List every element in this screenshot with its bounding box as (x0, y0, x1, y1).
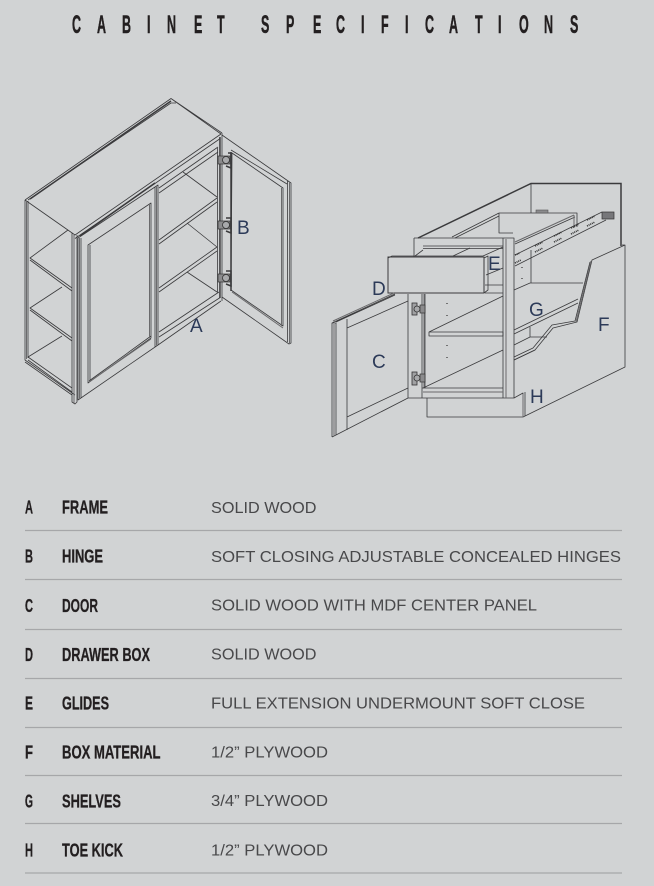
row B: SOFT CLOSING ADJUSTABLE CONCEALED HINGES (211, 549, 621, 566)
label D: D (372, 279, 386, 300)
row B (25, 546, 622, 580)
row E: E (25, 692, 33, 714)
open door (222, 135, 291, 344)
row D: SOLID WOOD (211, 646, 316, 664)
title: CABINET SPECIFICATIONS (72, 11, 578, 39)
row A: FRAME (62, 496, 108, 518)
drawer glide (515, 212, 614, 266)
row G (25, 790, 622, 824)
specification table (25, 496, 622, 873)
label C: C (372, 352, 386, 373)
front frame (408, 238, 514, 398)
closed door (78, 185, 158, 400)
diagram: wall cabinet (25, 98, 291, 404)
row H: H (25, 840, 33, 861)
row E: FULL EXTENSION UNDERMOUNT SOFT CLOSE (211, 696, 585, 712)
hinge lower (412, 372, 425, 385)
row C (25, 595, 622, 630)
row C: DOOR (62, 595, 98, 616)
row C: C (25, 595, 33, 616)
row F: F (25, 742, 33, 763)
hinge middle (218, 218, 231, 233)
row E: GLIDES (62, 692, 109, 714)
interior shelf and drawer rails (423, 267, 583, 388)
row E (25, 692, 622, 728)
row C: SOLID WOOD WITH MDF CENTER PANEL (211, 598, 537, 614)
row F: 1/2” PLYWOOD (211, 744, 328, 762)
row D: D (25, 644, 33, 665)
row F: BOX MATERIAL (62, 742, 160, 763)
row D: DRAWER BOX (62, 644, 150, 665)
toe kick (427, 392, 525, 417)
row G: G (25, 790, 33, 812)
row B: B (25, 546, 33, 567)
cabinet top and carcass (25, 98, 222, 404)
row A (25, 496, 622, 530)
label G: G (529, 300, 544, 321)
label A: A (190, 316, 203, 337)
row F (25, 742, 622, 776)
row G: 3/4” PLYWOOD (211, 793, 328, 810)
back and side panel (418, 184, 625, 417)
label B: B (237, 218, 250, 239)
row G: SHELVES (62, 790, 121, 812)
hinge upper (412, 303, 425, 315)
label H: H (530, 387, 544, 408)
row B: HINGE (62, 546, 103, 567)
right frame stile (218, 133, 222, 301)
open door C (332, 293, 408, 437)
pulled drawer box (452, 210, 577, 244)
label E: E (488, 254, 501, 275)
left side shelves (28, 230, 72, 392)
hinge bottom (218, 271, 231, 286)
row D (25, 644, 622, 678)
interior shelves (158, 147, 221, 345)
row A: SOLID WOOD (211, 500, 316, 517)
row H (25, 840, 622, 873)
row H: 1/2” PLYWOOD (211, 842, 328, 860)
row H: TOE KICK (62, 840, 123, 861)
hinge top (218, 153, 231, 168)
drawer front (388, 247, 503, 293)
label F: F (598, 315, 610, 336)
row A: A (25, 496, 33, 518)
diagram: base cabinet (332, 184, 625, 437)
